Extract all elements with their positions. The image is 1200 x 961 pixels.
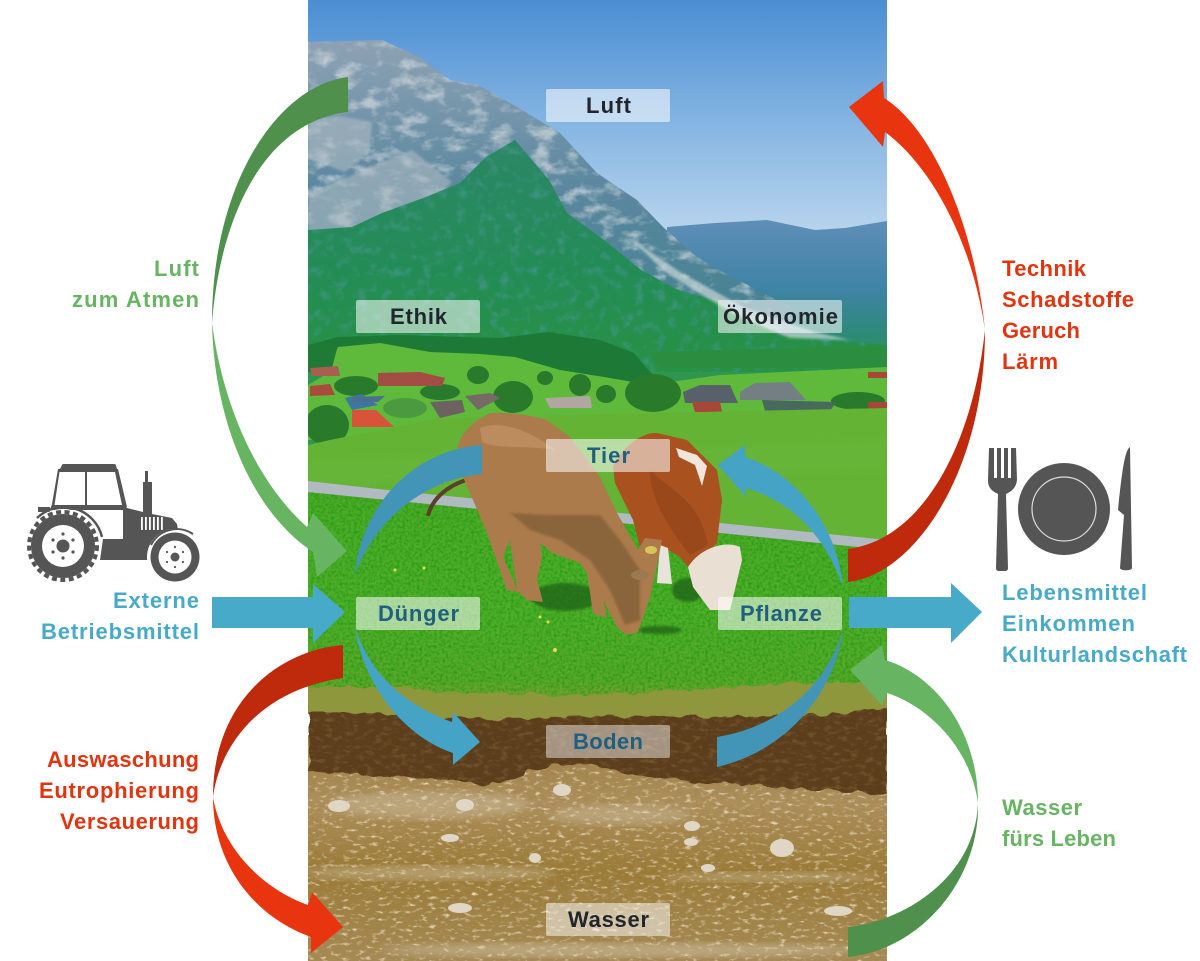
text: Technik Schadstoffe Geruch Lärm: Schadstoffe — [1002, 287, 1134, 312]
text: Auswaschung Eutrophierung Versauerung: Auswaschung — [47, 747, 199, 772]
arrow: Lebensmittel output (blue) — [849, 583, 982, 643]
text: Externe Betriebsmittel: Betriebsmittel — [41, 619, 199, 644]
text: Luft zum Atmen: zum Atmen — [72, 287, 199, 312]
label: Ökonomie: Ökonomie — [723, 304, 838, 329]
text: Wasser fürs Leben — [1002, 795, 1116, 851]
shadows under cows — [531, 578, 704, 634]
cycle arrow: Boden to Pflanze — [717, 630, 843, 767]
text: Technik Schadstoffe Geruch Lärm — [1002, 256, 1134, 374]
stones — [328, 784, 852, 916]
text: Wasser fürs Leben: fürs Leben — [1002, 826, 1116, 851]
text: Lebensmittel Einkommen Kulturlandschaft: Kulturlandschaft — [1002, 642, 1188, 667]
label: Luft: Luft — [586, 93, 632, 118]
photo: alpine farm landscape — [305, 0, 887, 961]
text: Auswaschung Eutrophierung Versauerung — [39, 747, 199, 834]
flowers — [394, 566, 557, 652]
icon: tractor — [26, 464, 203, 585]
dark topsoil — [308, 708, 887, 793]
main mountain — [308, 38, 798, 343]
label: Dünger — [356, 597, 480, 630]
arrow: Externe Betriebsmittel (blue) — [212, 584, 345, 643]
text: Externe Betriebsmittel — [41, 588, 199, 644]
text: Lebensmittel Einkommen Kulturlandschaft: Lebensmittel — [1002, 580, 1147, 605]
text: Luft zum Atmen — [72, 256, 200, 312]
cycle arrow: Dünger to Tier — [355, 445, 482, 575]
label: Tier — [546, 439, 670, 472]
label: Boden — [546, 725, 670, 758]
gravel soil — [305, 735, 887, 961]
label: Pflanze — [718, 597, 842, 630]
label: Ethik — [356, 300, 480, 333]
brown cow — [428, 413, 662, 635]
label: Wasser — [546, 903, 670, 936]
valley meadow — [308, 343, 887, 440]
tree line — [308, 332, 652, 382]
text: Externe Betriebsmittel: Externe — [113, 588, 199, 613]
road — [308, 481, 887, 550]
label: Boden: Boden — [573, 729, 643, 754]
cycle arrow: Dünger to Boden — [355, 627, 480, 765]
arrow: Auswaschung (red) — [213, 645, 343, 953]
text: Lebensmittel Einkommen Kulturlandschaft: Einkommen — [1002, 611, 1135, 636]
forested slope — [308, 138, 887, 373]
sky — [308, 0, 887, 230]
grass edge — [308, 682, 887, 725]
grass field — [308, 492, 887, 714]
label: Luft — [546, 89, 670, 122]
arrow: Wasser fürs Leben (green) — [848, 645, 978, 957]
text: Auswaschung Eutrophierung Versauerung: Versauerung — [60, 809, 199, 834]
text: Auswaschung Eutrophierung Versauerung: Eutrophierung — [39, 778, 199, 803]
arrow: Technik Schadstoffe (red) — [848, 81, 985, 582]
red and white cow — [613, 433, 742, 610]
text: Technik Schadstoffe Geruch Lärm: Technik — [1002, 256, 1087, 281]
label: Pflanze: Pflanze — [740, 601, 822, 626]
text: Wasser fürs Leben: Wasser — [1002, 795, 1082, 820]
left trees — [329, 350, 337, 367]
village houses — [310, 366, 887, 427]
trees — [305, 366, 885, 445]
text: Lebensmittel Einkommen Kulturlandschaft — [1002, 580, 1188, 667]
label: Tier: Tier — [587, 443, 630, 468]
cycle arrow: Pflanze to Tier — [718, 445, 843, 587]
icon: fork, plate and knife — [988, 447, 1132, 571]
label: Dünger: Dünger — [378, 601, 459, 626]
distant mountains — [667, 220, 887, 345]
text: Technik Schadstoffe Geruch Lärm: Lärm — [1002, 349, 1058, 374]
label: Wasser: Wasser — [568, 907, 649, 932]
label: Ethik: Ethik — [390, 304, 448, 329]
rockfall streak — [630, 238, 850, 340]
text: Luft zum Atmen: Luft — [154, 256, 200, 281]
foreground meadow — [308, 408, 887, 560]
text: Technik Schadstoffe Geruch Lärm: Geruch — [1002, 318, 1080, 343]
arrow: Luft zum Atmen (green) — [212, 77, 348, 577]
